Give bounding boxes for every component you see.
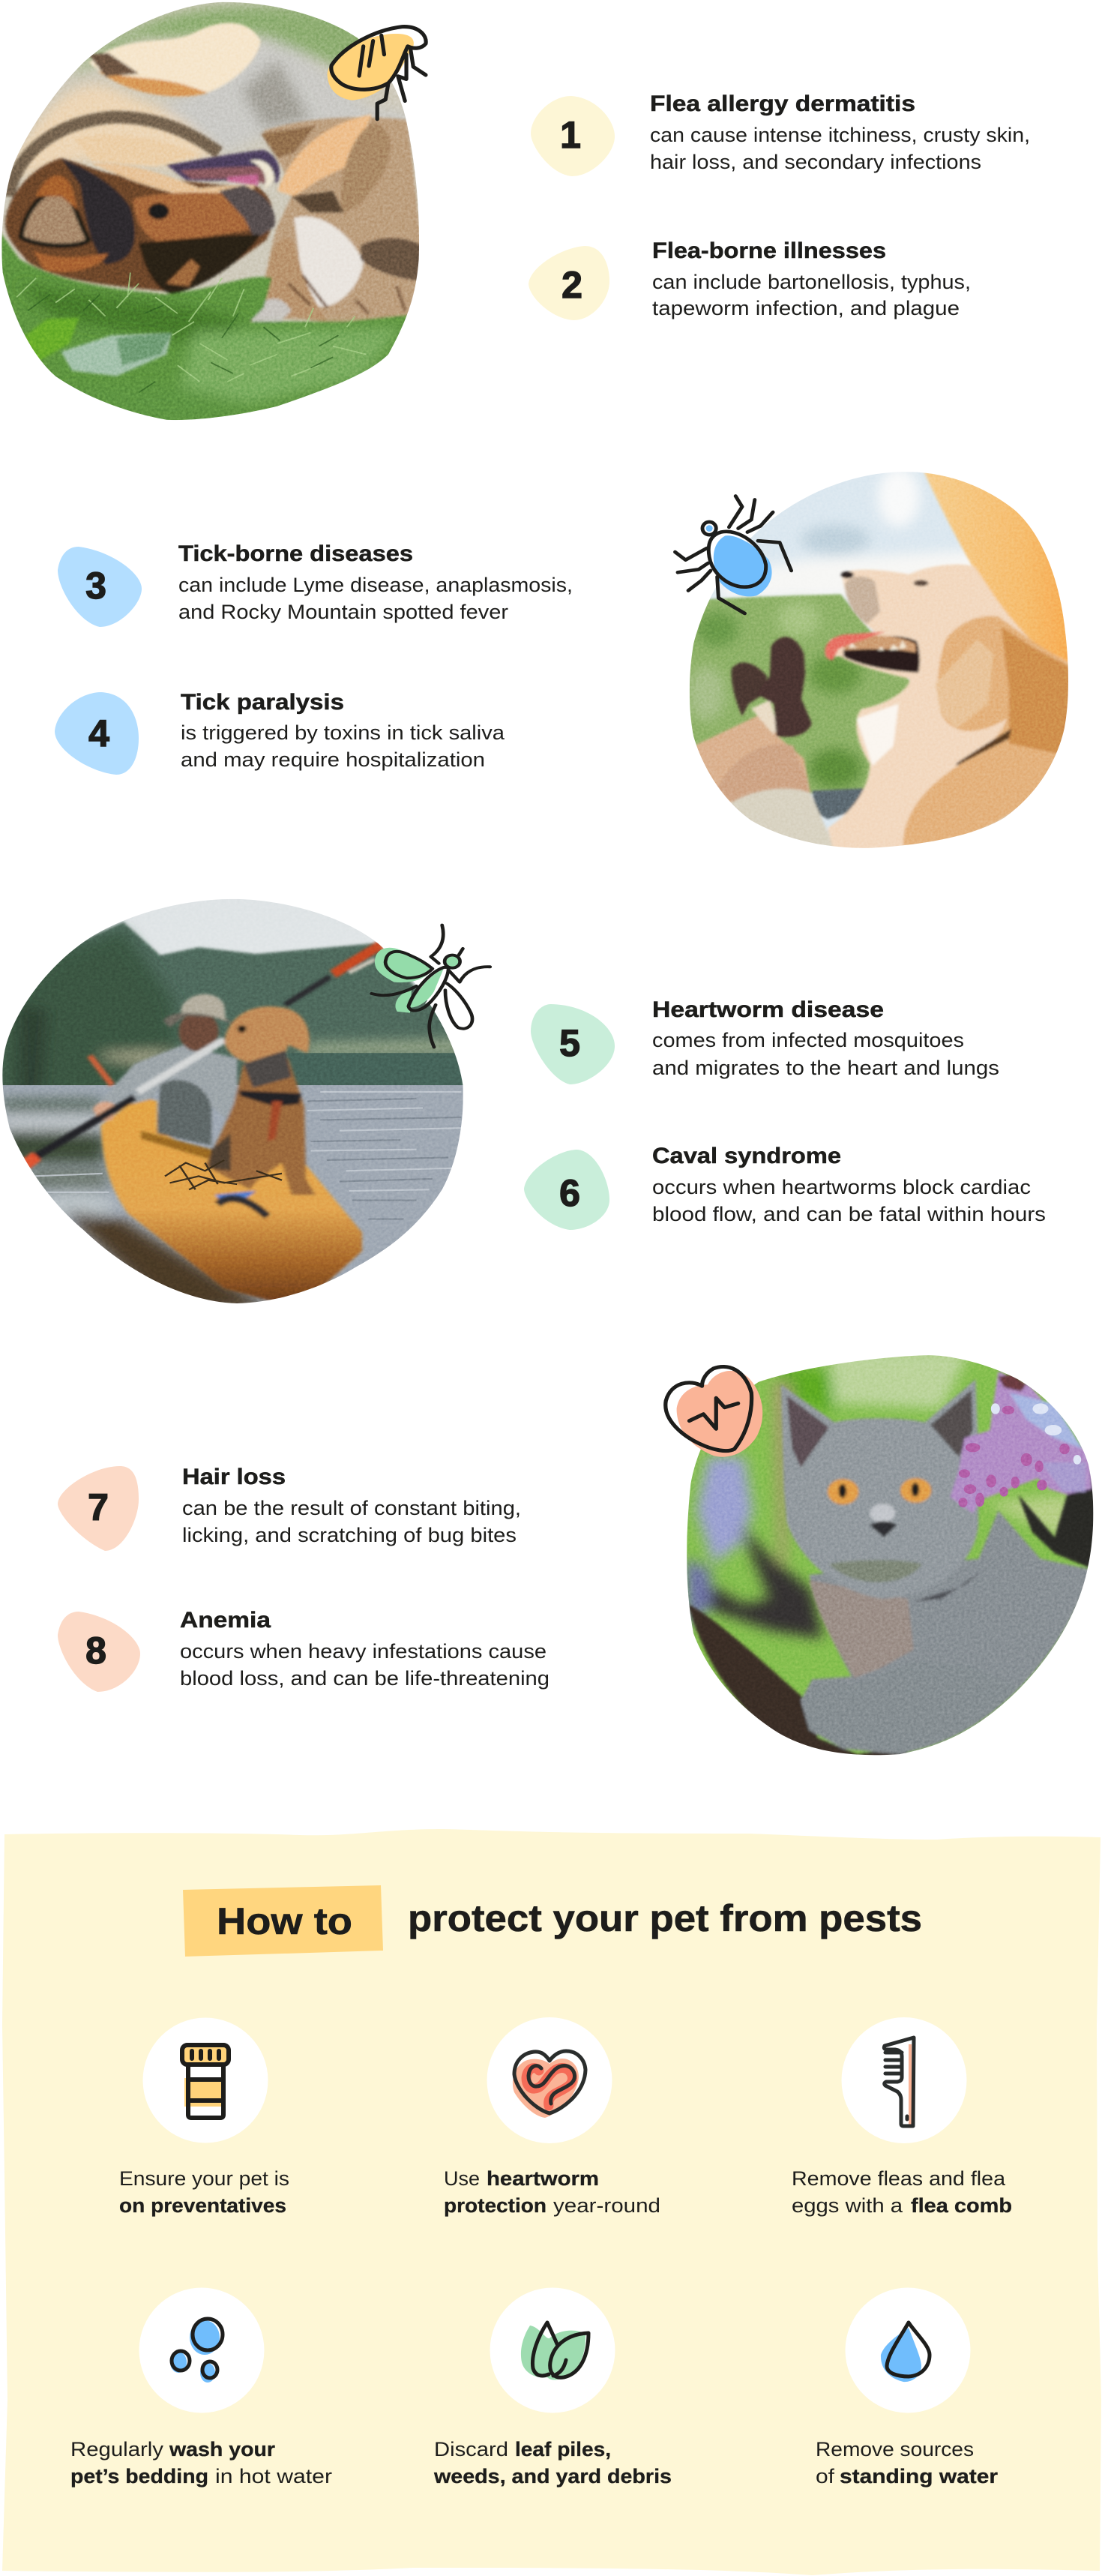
number badge 2: 2 <box>561 264 582 306</box>
highlight tag <box>183 1885 383 1957</box>
tip: wash bedding <box>70 2287 332 2488</box>
icon: leaves <box>490 2287 615 2413</box>
panel background <box>2 1829 1101 2575</box>
number badge 1 <box>531 96 615 176</box>
text: heartworm protection <box>444 2167 660 2217</box>
item 5 <box>531 997 999 1084</box>
panel: ticks <box>55 465 1093 863</box>
text: flea comb: flea comb <box>911 2194 1012 2217</box>
tip: preventatives <box>119 2017 289 2217</box>
text: heartworm disease <box>652 997 999 1079</box>
number badge 5 <box>531 1004 615 1084</box>
number badge 5: 5 <box>559 1022 580 1064</box>
icon: bubbles <box>139 2287 264 2413</box>
item 3 <box>58 541 573 627</box>
text: caval syndrome <box>652 1144 1046 1225</box>
text: on preventatives <box>119 2167 289 2217</box>
item 6 <box>524 1144 1046 1230</box>
text: flea-borne illnesses <box>652 238 971 319</box>
tip: standing water <box>816 2287 998 2488</box>
text: flea comb: eggs with a <box>792 2194 903 2217</box>
number badge 2 <box>529 246 609 320</box>
text: heartworm protection: protection <box>444 2194 547 2217</box>
item 4 <box>55 690 505 775</box>
icon: heart with pulse <box>666 1366 762 1457</box>
text: flea-borne illnesses: Flea-borne illnesses <box>652 238 886 263</box>
text: anemia: blood loss, and can be life-threatening <box>180 1667 550 1690</box>
panel: how to protect your pet <box>2 1829 1101 2575</box>
photo: grey cat <box>687 1355 1093 1755</box>
text: wash your pet's bedding: Regularly <box>70 2438 164 2461</box>
text: caval syndrome: occurs when heartworms block cardiac <box>652 1176 1031 1198</box>
text: heartworm disease: comes from infected mosquitoes <box>652 1029 964 1051</box>
text: heartworm protection: Use <box>444 2167 480 2190</box>
panel: mosquitoes <box>0 892 1046 1321</box>
number badge 4: 4 <box>88 712 109 754</box>
text: tick paralysis: Tick paralysis <box>181 690 344 715</box>
text: tick-borne diseases: can include Lyme disease, anaplasmosis, <box>178 574 573 596</box>
text: anemia: Anemia <box>180 1608 271 1633</box>
number badge 7 <box>58 1466 139 1551</box>
text: discard leaf piles: leaf piles, <box>515 2438 611 2461</box>
number badge 3: 3 <box>85 565 106 607</box>
item 8 <box>58 1608 550 1692</box>
text: flea allergy dermatitis: Flea allergy dermatitis <box>650 91 915 116</box>
icon: flea <box>328 27 426 119</box>
text: standing water: Remove sources <box>816 2438 974 2461</box>
number badge 8 <box>58 1612 140 1692</box>
text: flea comb <box>792 2167 1012 2217</box>
text: heartworm protection: heartworm <box>487 2167 599 2190</box>
text: anemia: occurs when heavy infestations cause <box>180 1640 547 1663</box>
text: flea allergy dermatitis: hair loss, and secondary infections <box>650 151 981 173</box>
panel: fleas <box>0 0 1030 436</box>
number badge 7: 7 <box>88 1486 109 1528</box>
text: on preventatives: Ensure your pet is <box>119 2167 289 2190</box>
photo: dog on kayak <box>2 899 463 1303</box>
text: on preventatives: on preventatives <box>119 2194 286 2217</box>
text: tick paralysis: and may require hospitalization <box>181 748 485 771</box>
text: flea-borne illnesses: tapeworm infection, and plague <box>652 297 960 319</box>
photo: golden retriever by tent <box>690 472 1068 848</box>
text: heartworm disease: Heartworm disease <box>652 997 884 1022</box>
text: flea-borne illnesses: can include bartonellosis, typhus, <box>652 271 971 293</box>
text: tick-borne diseases: Tick-borne diseases <box>178 541 413 566</box>
number badge 6 <box>524 1150 609 1230</box>
icon: mosquito <box>372 925 490 1047</box>
photo: dog and cat on grass <box>0 0 444 436</box>
text: heartworm disease: and migrates to the heart and lungs <box>652 1057 999 1079</box>
heading <box>183 1885 922 1957</box>
item 7 <box>58 1465 521 1551</box>
text: tick paralysis: is triggered by toxins in tick saliva <box>181 721 505 744</box>
icon: comb <box>841 2017 967 2143</box>
text: wash your pet's bedding <box>70 2438 332 2488</box>
number badge 6: 6 <box>559 1172 580 1214</box>
icon: heart with worm <box>487 2017 612 2143</box>
number badge 8: 8 <box>85 1630 106 1672</box>
panel: symptoms <box>58 1350 1102 1778</box>
text: wash your pet's bedding: pet’s bedding <box>70 2465 208 2488</box>
text: hair loss: licking, and scratching of bug bites <box>182 1524 517 1546</box>
text: standing water: standing water <box>840 2465 998 2488</box>
text: standing water <box>816 2438 998 2488</box>
icon: water drop <box>846 2287 970 2413</box>
number badge 4 <box>55 692 139 775</box>
item 1 <box>531 91 1030 176</box>
icon: medicine vial <box>142 2017 268 2143</box>
text: anemia <box>180 1608 550 1690</box>
text: flea allergy dermatitis <box>650 91 1030 173</box>
text: caval syndrome: blood flow, and can be fatal within hours <box>652 1203 1046 1225</box>
tip: flea comb <box>792 2017 1012 2217</box>
tip: heartworm protection <box>444 2017 660 2217</box>
item 2 <box>529 238 971 320</box>
text: tick paralysis <box>181 690 505 771</box>
text: discard leaf piles: Discard <box>434 2438 508 2461</box>
text: hair loss <box>182 1465 521 1546</box>
text: heartworm protection: year-round <box>553 2194 660 2217</box>
heading text: how to: How to <box>217 1900 352 1942</box>
number badge 3 <box>58 547 142 627</box>
text: tick-borne diseases <box>178 541 573 623</box>
text: flea allergy dermatitis: can cause intense itchiness, crusty skin, <box>650 124 1030 146</box>
text: standing water: of <box>816 2465 835 2488</box>
text: hair loss: Hair loss <box>182 1465 286 1489</box>
text: caval syndrome: Caval syndrome <box>652 1144 841 1168</box>
text: tick-borne diseases: and Rocky Mountain spotted fever <box>178 601 508 623</box>
tip: discard leaf piles <box>433 2287 672 2488</box>
icon: tick <box>675 496 792 613</box>
text: wash your pet's bedding: wash your <box>169 2438 275 2461</box>
text: discard leaf piles: weeds, and yard debris <box>433 2465 672 2488</box>
heading text: protect your pet from pests: protect your pet from pests <box>408 1897 922 1939</box>
text: hair loss: can be the result of constant biting, <box>182 1497 521 1519</box>
text: wash your pet's bedding: in hot water <box>215 2465 332 2488</box>
text: discard leaf piles <box>433 2438 672 2488</box>
number badge 1: 1 <box>560 114 581 156</box>
text: flea comb: Remove fleas and flea <box>792 2167 1005 2190</box>
